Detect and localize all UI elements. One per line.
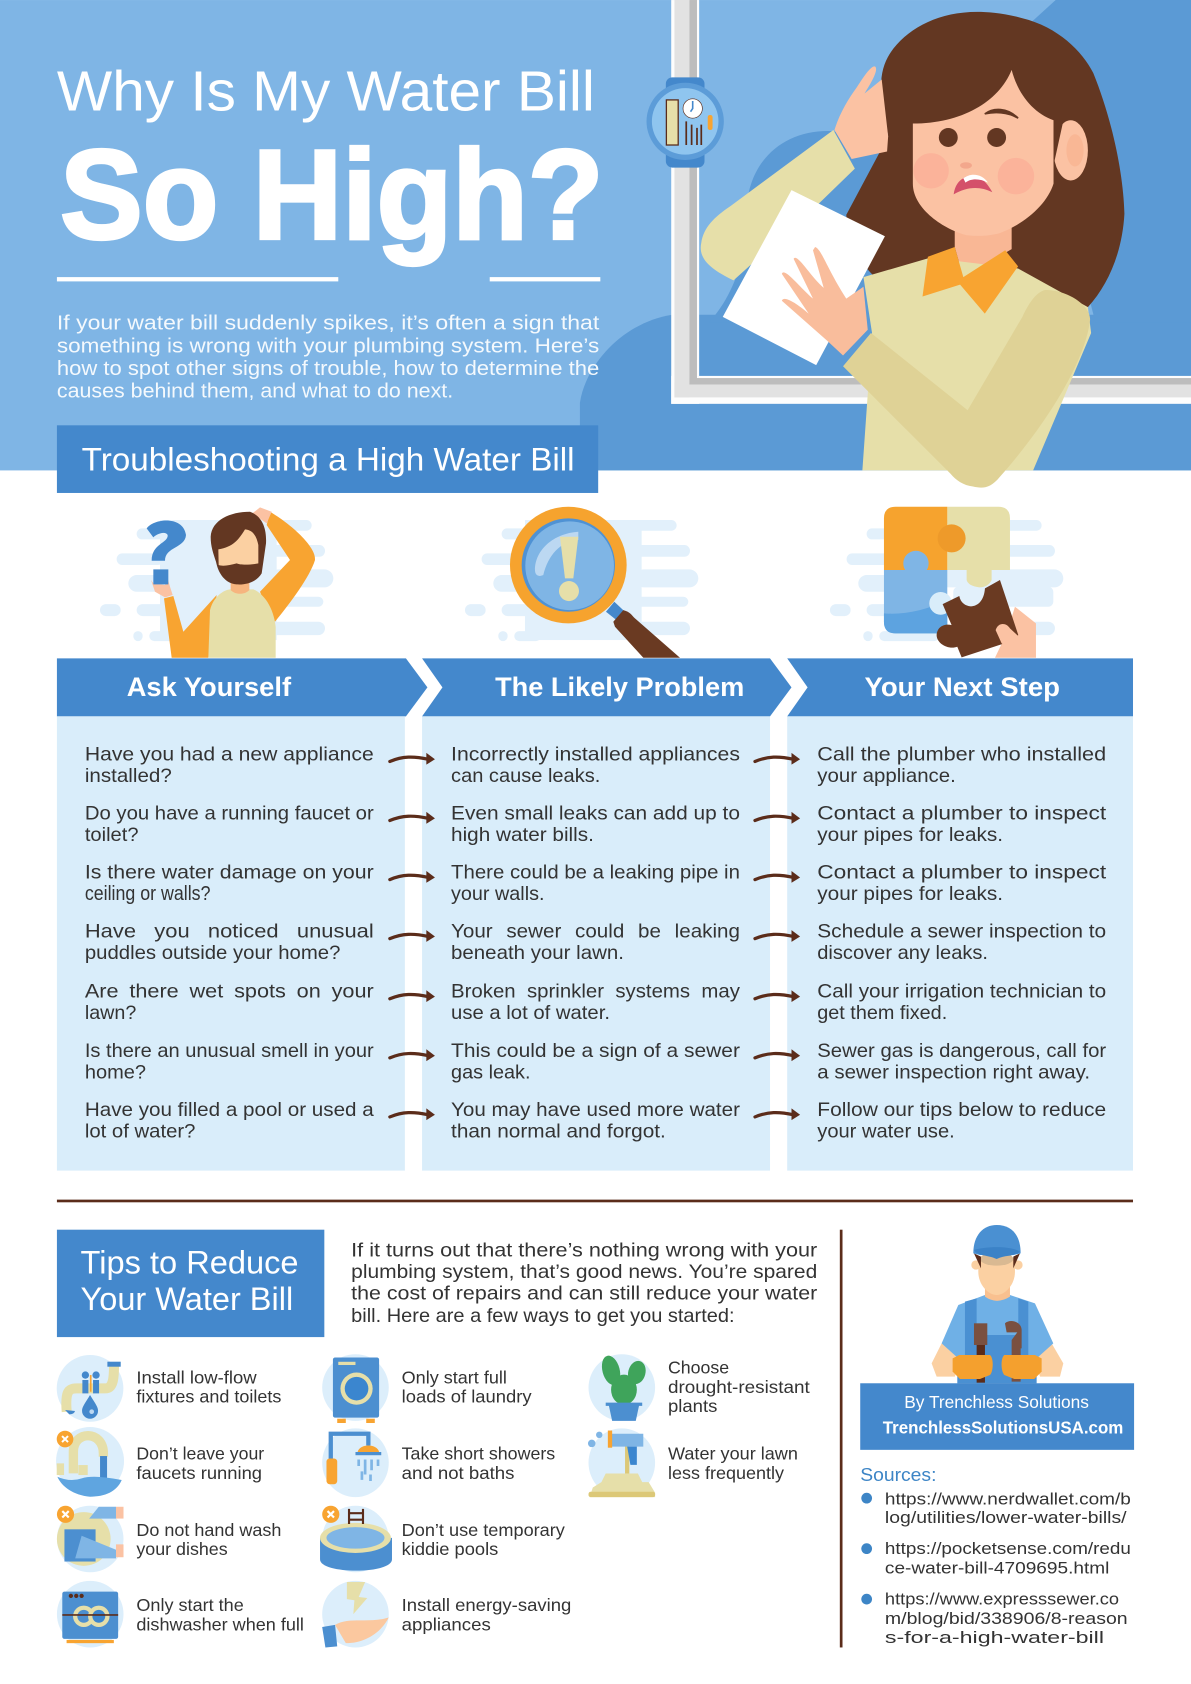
head hair and beard: [211, 512, 266, 584]
panel: next step list: Sewer gas is dangerous, call for: [817, 1041, 1107, 1062]
title: So High?: [60, 123, 604, 265]
tip text: dishwasher when full: [136, 1614, 304, 1634]
intro paragraph: If your water bill suddenly spikes, it’s often a sign that: [57, 313, 600, 335]
illustration: plumber: [932, 1225, 1063, 1383]
tip text: your dishes: [136, 1539, 228, 1559]
cap: [973, 1225, 1021, 1255]
column header: Your Next Step: Your Next Step: [865, 672, 1060, 702]
panel: ask yourself list: installed?: [85, 766, 172, 787]
panel: likely problem list: high water bills.: [451, 825, 594, 846]
panel: ask yourself list: Have you filled a pool or used a: [85, 1100, 374, 1121]
title: [57, 60, 604, 281]
panel: next step list: Call your irrigation technician to: [817, 982, 1106, 1003]
credit box: By Trenchless Solutions: [904, 1392, 1089, 1412]
credit box: [860, 1383, 1134, 1450]
title: Why Is My Water Bill: [57, 60, 595, 124]
column header: Ask Yourself: Ask Yourself: [127, 672, 291, 702]
tip text: appliances: [402, 1614, 491, 1634]
face: [978, 1258, 1015, 1295]
tip: low-flow fixtures: [57, 1355, 123, 1422]
tip text: [402, 1520, 565, 1559]
sources: log/utilities/lower-water-bills/: [885, 1508, 1127, 1527]
icon: puzzle pieces: [830, 507, 1063, 658]
sources: https://www.expresssewer.co: [885, 1589, 1119, 1608]
hair: [846, 12, 1124, 307]
column header: Ask Yourself: [57, 658, 427, 716]
heading box: troubleshooting: Troubleshooting a High Water Bill: [82, 441, 575, 477]
panel: header background: [0, 0, 1191, 470]
icon: confused man: [100, 507, 333, 658]
blush, eyes, brow, nose, mouth: [913, 153, 949, 189]
icon: magnifying glass: [465, 507, 698, 658]
blue piece: [884, 570, 947, 633]
panel: ask yourself list: Have you had a new appliance: [85, 744, 374, 765]
hair strand by ear: [1054, 118, 1063, 165]
collar: [923, 247, 1018, 314]
heading box: tips: Tips to Reduce: [81, 1245, 299, 1281]
panel: ask yourself list: Have you noticed unusual: [85, 922, 374, 943]
panel: likely problem list: You may have used more water: [451, 1100, 741, 1121]
tip: water lawn less: [588, 1428, 655, 1497]
panel: ask yourself list: Are there wet spots on your: [85, 982, 374, 1003]
tip text: Don’t use temporary: [402, 1520, 565, 1540]
torso: [208, 589, 276, 658]
tips intro paragraph: plumbing system, that’s good news. You’re spared: [351, 1262, 817, 1283]
tip: faucets running: [56, 1427, 124, 1497]
tips intro paragraph: [351, 1241, 818, 1327]
panel: next step list: your pipes for leaks.: [817, 884, 1003, 905]
intro paragraph: [57, 313, 600, 402]
tip text: faucets running: [136, 1463, 262, 1483]
panel: ask yourself list: lawn?: [85, 1003, 137, 1024]
tip text: [136, 1367, 281, 1407]
panel: likely problem list: can cause leaks.: [451, 766, 600, 787]
neck: [985, 1282, 1010, 1301]
panel: ask yourself list: puddles outside your home?: [85, 943, 341, 964]
question mark: [147, 520, 186, 561]
illustration: window frame: [671, 0, 1191, 404]
forearm: [843, 290, 1090, 488]
panel: likely problem list: There could be a leaking pipe in: [451, 863, 740, 884]
overalls: [957, 1298, 1037, 1383]
panel: likely problem list: use a lot of water.: [451, 1003, 610, 1024]
tips intro paragraph: If it turns out that there’s nothing wrong with your: [351, 1241, 818, 1262]
panel: next step list: a sewer inspection right away.: [817, 1062, 1090, 1083]
face: [913, 70, 1054, 236]
panel: next step list: get them fixed.: [817, 1003, 947, 1024]
sweater: [862, 258, 1091, 470]
tip text: drought-resistant: [668, 1377, 810, 1397]
column header: The Likely Problem: The Likely Problem: [495, 672, 744, 702]
cap shadow and hair: [980, 1252, 1013, 1266]
tip: short showers: [322, 1428, 389, 1497]
panel: next step list: discover any leaks.: [817, 943, 988, 964]
tip text: loads of laundry: [402, 1387, 532, 1407]
panel: likely problem list: This could be a sign of a sewer: [451, 1041, 741, 1062]
intro paragraph: causes behind them, and what to do next.: [57, 380, 453, 402]
tip text: plants: [668, 1396, 717, 1416]
tips intro paragraph: the cost of repairs and can still reduce your water: [351, 1283, 818, 1304]
illustration: worried woman holding a bill: [701, 12, 1124, 488]
panel: ask yourself list: Is there an unusual smell in your: [85, 1041, 374, 1062]
heading box: troubleshooting: [57, 425, 598, 493]
tip: hand wash dishes: [57, 1506, 124, 1572]
tip text: Do not hand wash: [136, 1520, 281, 1540]
face: [218, 529, 258, 566]
brown piece: [937, 580, 1018, 657]
tip text: Water your lawn: [668, 1444, 798, 1464]
panel: likely problem list: Incorrectly installed appliances: [451, 744, 740, 765]
hand on paper: [782, 247, 868, 356]
tips intro paragraph: bill. Here are a few ways to get you started:: [351, 1306, 735, 1327]
panel: next step list: Contact a plumber to inspect: [817, 803, 1107, 824]
orange piece: [884, 507, 947, 570]
tip: energy-saving appliances: [322, 1581, 389, 1647]
panel: next step list: Contact a plumber to inspect: [817, 863, 1107, 884]
tools: [977, 1345, 985, 1383]
sources: https://pocketsense.com/redu: [885, 1539, 1131, 1558]
tip text: Only start full: [402, 1367, 507, 1387]
tip text: Choose: [668, 1358, 729, 1378]
arrows: question to problem: [390, 753, 435, 1120]
thumb: [996, 624, 1019, 648]
tip text: [402, 1595, 571, 1634]
panel: likely problem list: beneath your lawn.: [451, 943, 624, 964]
tip text: [136, 1520, 281, 1559]
panel: next step list: your pipes for leaks.: [817, 825, 1003, 846]
tip text: [402, 1444, 555, 1483]
tip: full laundry loads: [322, 1354, 389, 1423]
tip text: [668, 1358, 810, 1416]
panel: likely problem list: [422, 716, 770, 1171]
panel: likely problem list: Even small leaks can add up to: [451, 803, 740, 824]
panel: ask yourself list: Do you have a running faucet or: [85, 803, 374, 824]
column header: The Likely Problem: [422, 658, 791, 716]
shirt: [942, 1295, 1053, 1358]
panel: likely problem list: Broken sprinkler systems may: [451, 982, 740, 1003]
paper bill: [723, 190, 885, 365]
sources: ce-water-bill-4709695.html: [885, 1558, 1109, 1577]
column header: Your Next Step: [787, 658, 1133, 716]
sources: https://www.nerdwallet.com/b: [885, 1490, 1131, 1509]
hand on head: [252, 507, 272, 523]
panel: next step list: [787, 716, 1133, 1171]
intro paragraph: something is wrong with your plumbing system. Here’s: [57, 335, 599, 357]
panel: likely problem list: your walls.: [451, 884, 544, 905]
ear: [1054, 120, 1088, 180]
tip: kiddie pools: [320, 1506, 392, 1572]
raised left hand: [151, 577, 173, 597]
panel: next step list: Call the plumber who installed: [817, 744, 1106, 765]
credit box: TrenchlessSolutionsUSA.com: [883, 1418, 1123, 1438]
tip text: [136, 1444, 264, 1483]
ears: [971, 1260, 981, 1270]
panel: ask yourself list: toilet?: [85, 825, 139, 846]
icon: water meter: [647, 77, 724, 168]
panel: ask yourself list: lot of water?: [85, 1121, 196, 1142]
left arm: [164, 595, 217, 658]
heading box: tips: [57, 1230, 324, 1337]
panel: ask yourself list: home?: [85, 1062, 146, 1083]
raised hand: [834, 66, 888, 159]
panel: next step list: Schedule a sewer inspection to: [817, 922, 1106, 943]
tip text: less frequently: [668, 1463, 784, 1483]
neck: [231, 582, 249, 594]
heading box: tips: Your Water Bill: [81, 1281, 293, 1317]
panel: likely problem list: than normal and forgot.: [451, 1121, 666, 1142]
tip text: Take short showers: [402, 1444, 555, 1464]
sources: [860, 1464, 1131, 1647]
tip text: and not baths: [402, 1463, 514, 1483]
panel: likely problem list: gas leak.: [451, 1062, 531, 1083]
arms: [932, 1343, 960, 1377]
tip: dishwasher: [57, 1581, 124, 1647]
arrows: problem to next step: [755, 753, 800, 1120]
raised arm: [701, 130, 855, 280]
tip text: Install low-flow: [136, 1367, 257, 1387]
intro paragraph: how to spot other signs of trouble, how to determine the: [57, 358, 599, 380]
panel: ask yourself list: ceiling or walls?: [85, 883, 210, 905]
hand: [995, 607, 1036, 658]
sources: m/blog/bid/338906/8-reason: [885, 1609, 1128, 1628]
right arm: [260, 512, 315, 622]
tip text: kiddie pools: [402, 1539, 498, 1559]
panel: next step list: your appliance.: [817, 766, 956, 787]
neck: [955, 220, 1012, 277]
sources: Sources:: [860, 1464, 936, 1485]
panel: next step list: Follow our tips below to reduce: [817, 1100, 1106, 1121]
tip text: Don’t leave your: [136, 1444, 264, 1464]
panel: ask yourself list: Is there water damage on your: [85, 863, 374, 884]
tip text: [136, 1595, 304, 1634]
tip: drought-resistant plants: [589, 1354, 655, 1421]
tip text: Install energy-saving: [402, 1595, 571, 1615]
tip text: Only start the: [136, 1595, 244, 1615]
tip text: [402, 1367, 532, 1407]
sources: s-for-a-high-water-bill: [885, 1628, 1104, 1647]
panel: next step list: your water use.: [817, 1121, 955, 1142]
tip text: fixtures and toilets: [136, 1387, 281, 1407]
panel: ask yourself list: [57, 716, 405, 1171]
tip text: [668, 1444, 798, 1483]
beige piece: [947, 507, 1010, 587]
gloves: [953, 1355, 993, 1379]
panel: likely problem list: Your sewer could be leaking: [451, 922, 740, 943]
